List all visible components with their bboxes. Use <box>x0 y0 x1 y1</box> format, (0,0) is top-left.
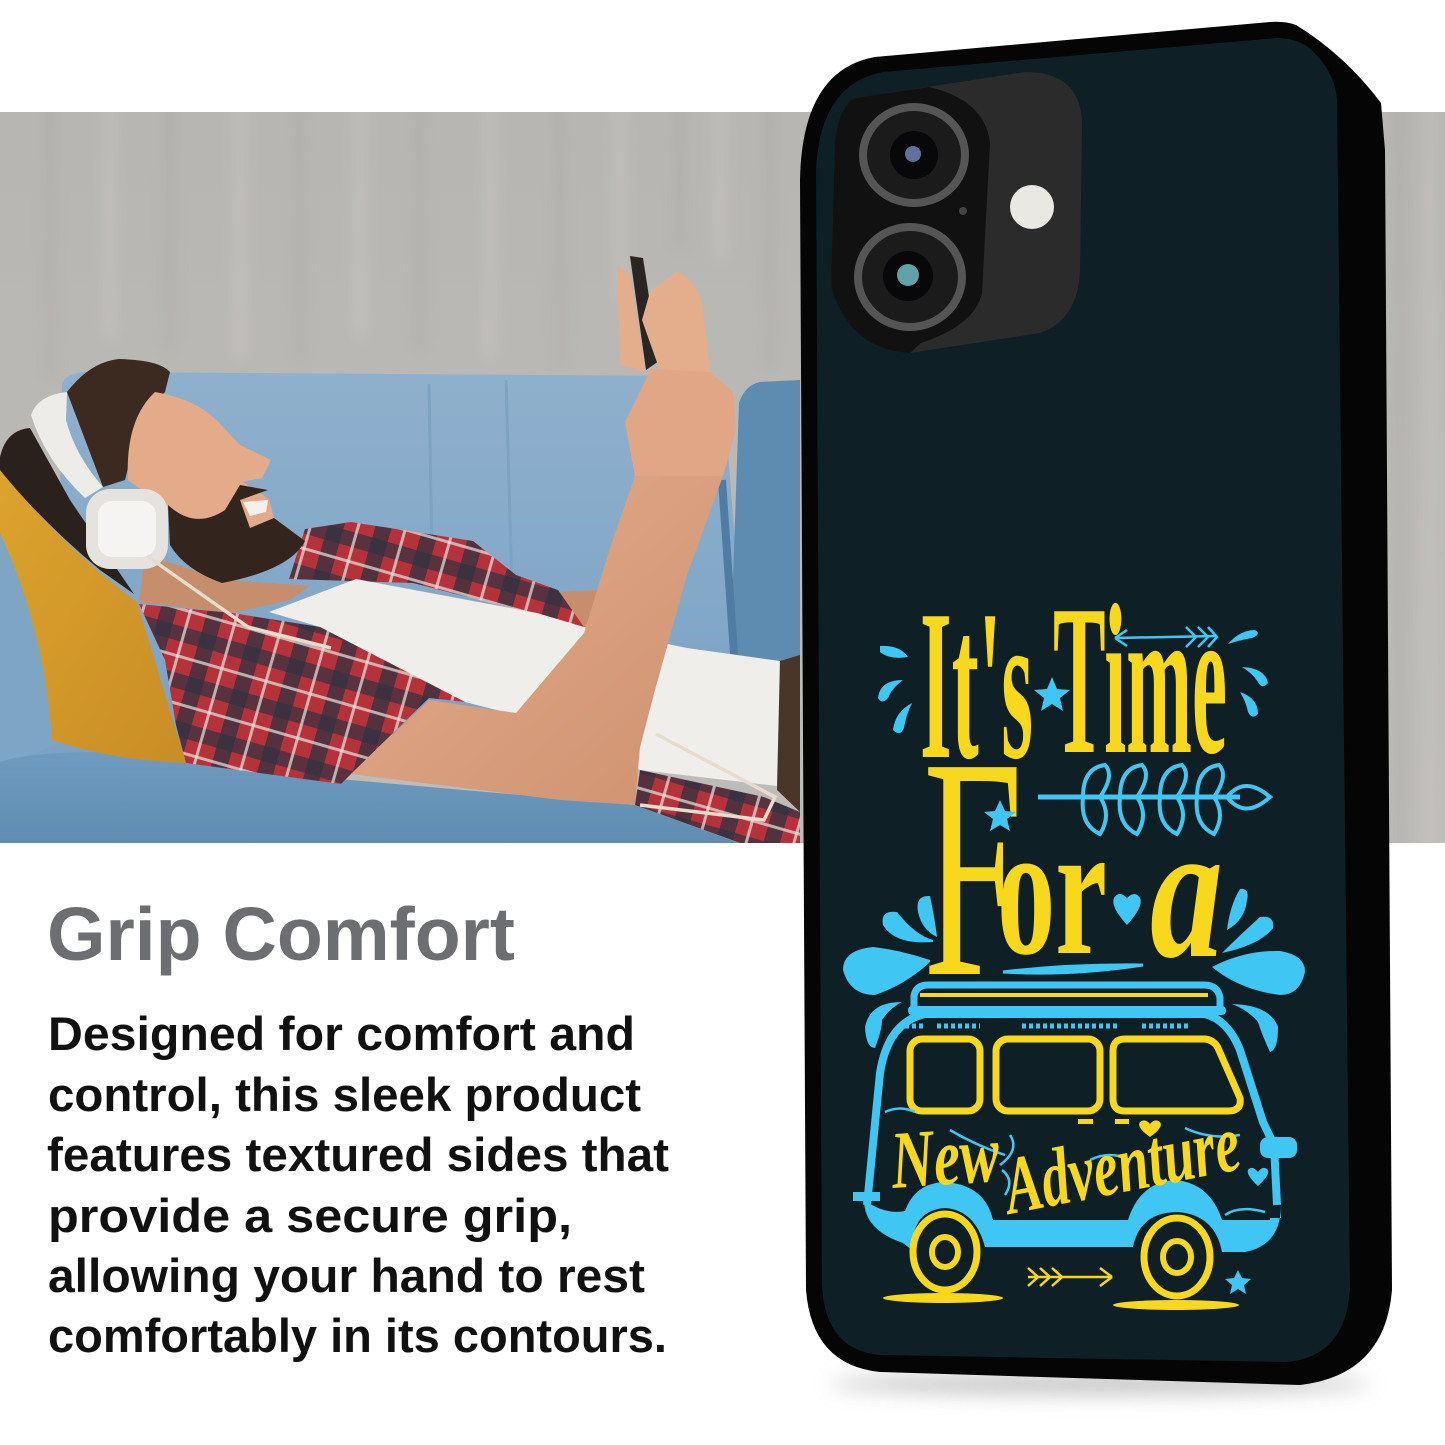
camera island <box>831 72 1082 353</box>
van lettering: New <box>887 1108 1002 1206</box>
hair <box>67 359 170 487</box>
heading: Grip Comfort <box>47 892 515 976</box>
hand holding phone <box>617 265 710 372</box>
arm <box>351 476 723 805</box>
headphones <box>31 392 775 820</box>
sofa arm <box>730 380 800 668</box>
dark lens bar <box>831 87 990 353</box>
plaid shirt body <box>139 604 465 784</box>
man <box>0 256 800 843</box>
fist <box>625 369 736 476</box>
arrow and leaf branch <box>1038 627 1270 834</box>
ground arrow <box>1028 1268 1112 1286</box>
trousers <box>777 655 800 812</box>
phone in hand <box>630 256 659 370</box>
lower plaid shirt <box>635 770 800 843</box>
van windows <box>910 1039 1240 1111</box>
case outer body <box>800 22 1392 1385</box>
left cushion <box>0 533 33 762</box>
body text: allowing your hand to rest <box>48 1249 645 1302</box>
van <box>853 985 1297 1310</box>
body text: provide a secure grip, <box>48 1189 572 1242</box>
upper plaid collar <box>289 522 584 627</box>
teeth <box>243 500 268 516</box>
lettering: It's Time: It's <box>920 565 1033 804</box>
body text <box>47 1007 669 1362</box>
body text: features textured sides that <box>47 1128 669 1181</box>
rear hair and shadow behind head <box>0 428 134 594</box>
phone case shadow <box>830 1374 1370 1394</box>
lettering: For a <box>923 693 1223 1043</box>
far arm <box>560 590 598 628</box>
white t-shirt <box>269 579 780 786</box>
van body outline <box>867 1014 1277 1205</box>
face <box>128 392 305 541</box>
beard <box>168 485 305 583</box>
printed back panel <box>816 38 1350 1362</box>
window ticks and yellow heart <box>1078 1119 1161 1137</box>
phone case <box>800 22 1392 1385</box>
bumper knob and stub <box>1260 1137 1297 1158</box>
body text: control, this sleek product <box>48 1068 641 1121</box>
artwork <box>843 560 1305 1310</box>
neck <box>139 555 310 613</box>
van roof ornaments <box>905 1024 1190 1028</box>
van leaf ornaments <box>885 1108 1265 1215</box>
body text: comfortably in its contours. <box>48 1309 667 1362</box>
roof rack <box>914 985 1220 1008</box>
stars and heart <box>984 677 1251 1294</box>
wheels <box>883 1214 1239 1310</box>
lower lens <box>854 223 966 331</box>
body text: Designed for comfort and <box>48 1007 635 1060</box>
sofa <box>0 372 800 843</box>
seat <box>0 752 739 843</box>
splash drops <box>843 630 1305 1052</box>
wall background <box>0 112 1445 843</box>
lettering: For a: or <box>997 785 1107 995</box>
lettering: For a: a <box>1150 783 1223 999</box>
van lettering: Adventure <box>993 1097 1247 1232</box>
lettering: For a: F <box>923 693 1023 1043</box>
sofa back <box>0 372 745 770</box>
lifestyle photo band <box>0 100 1445 860</box>
flash <box>1010 185 1054 229</box>
van lettering <box>887 1097 1247 1232</box>
pillow <box>0 468 186 763</box>
upper lens <box>859 103 969 207</box>
van lower band <box>864 1180 1281 1252</box>
